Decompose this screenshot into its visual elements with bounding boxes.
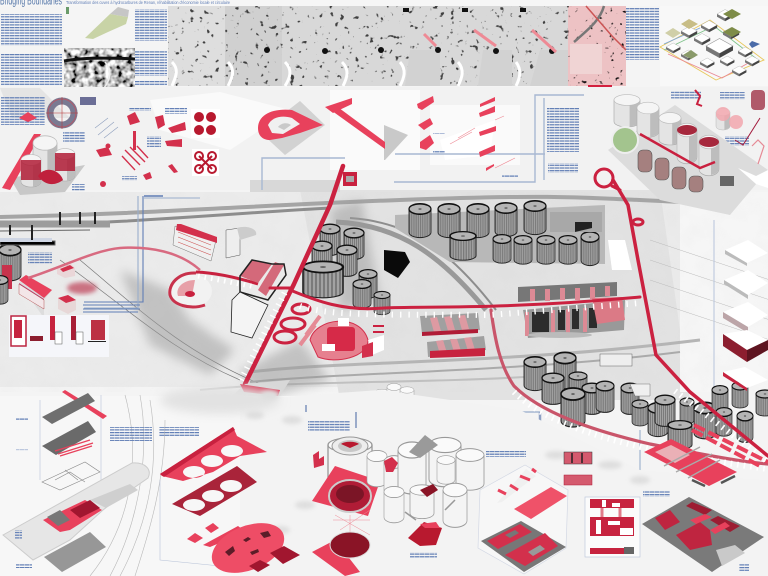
red stripes (55, 440, 93, 456)
panel: red component explosions (95, 112, 186, 187)
panel: red and grey tank group, left (2, 134, 85, 195)
red edged roof (723, 367, 768, 388)
pink bridge curve (28, 248, 200, 278)
lower red unit (408, 522, 442, 546)
red part 2 (418, 118, 433, 130)
map: pink colour aerial (568, 6, 626, 87)
panel: stacked roof studies, right (723, 240, 768, 391)
map: green regional map (64, 6, 135, 47)
pink construction lines (333, 510, 370, 535)
wire frame structure (42, 462, 100, 490)
site: small ghost tanks left of lower area (375, 383, 414, 408)
text blocks: annotations in left band (63, 108, 187, 191)
block C (57, 264, 75, 278)
site: upper tank row (395, 201, 632, 270)
small red stair and pink tanks (695, 90, 765, 164)
dark red squares (249, 546, 300, 572)
lower red-hatched tanks (638, 150, 703, 192)
top roof (497, 469, 536, 503)
panel: exploded axonometric, left (3, 390, 149, 572)
panel: lower ground (0, 386, 768, 576)
site: left small buildings and tanks (0, 212, 200, 318)
eastern road (613, 180, 768, 456)
site: lower tanks and buildings (524, 352, 768, 449)
colour swatch (80, 97, 96, 105)
text block: right column (626, 8, 659, 60)
panel: ghost tanks cluster (367, 435, 484, 546)
panel: small red elevations (9, 315, 109, 357)
floor plan (481, 521, 566, 572)
tank far left (0, 244, 21, 304)
white tanks (614, 95, 681, 145)
main diagonal road (245, 166, 343, 384)
block B (58, 295, 76, 314)
panel: round tank studies (306, 405, 380, 576)
green tank (612, 127, 638, 153)
red hairline section (486, 164, 494, 171)
plans: framed floor plans (585, 497, 640, 557)
red plate 4 (479, 145, 495, 157)
grey plate two (42, 421, 96, 455)
panel: red roof sections (478, 465, 568, 574)
site: red striped hall (231, 260, 286, 338)
text blocks: lower-right (643, 490, 749, 571)
red part 3 (420, 135, 434, 150)
site: black shadow blob (384, 250, 410, 278)
text block: tank area notes (547, 91, 749, 173)
panel: red plates with three holes (160, 427, 300, 576)
illustration: exploded building parts, centre (417, 96, 515, 171)
red diamond (19, 112, 37, 122)
plans: four-circle red plan (191, 109, 220, 138)
red plate 1 (480, 97, 495, 107)
north ring (595, 169, 613, 187)
map: black and white aerial photo (64, 48, 135, 90)
site: red-roofed sheds (420, 313, 486, 358)
grey roof sheet (409, 435, 438, 458)
panel: sequence of grey urban maps (168, 6, 568, 86)
grey core block (47, 510, 70, 526)
pink roof (514, 487, 567, 519)
red isometric plate (312, 466, 380, 516)
module tiles (666, 10, 759, 76)
panel: middle band building blocks (0, 87, 768, 192)
red building core (43, 500, 102, 532)
small red stack (313, 451, 324, 468)
site: ring courtyard (168, 272, 258, 308)
illustration: red bar (325, 98, 385, 149)
top plate (160, 427, 267, 481)
oval plate (205, 513, 291, 576)
lower round plate (312, 540, 360, 576)
small red squares (187, 523, 246, 547)
lateral road (270, 286, 292, 290)
lower unit roof (420, 522, 440, 528)
blue ductwork frames (83, 196, 714, 560)
site: red loop building with running track (274, 304, 384, 360)
text blocks: lower-left (15, 418, 199, 568)
small red stair (420, 484, 438, 497)
grey plate one (42, 393, 95, 424)
white frame panel (478, 465, 568, 574)
site: red apartment block (173, 224, 256, 261)
dark red block (723, 330, 768, 350)
red plate 2 (479, 106, 495, 117)
red unit (384, 457, 398, 472)
illustration: red teardrop plate (258, 101, 325, 155)
pink lower road (491, 310, 768, 464)
text block: ghost tanks notes (410, 451, 526, 558)
panel: site plan ground (0, 190, 768, 400)
ring diagram (46, 97, 78, 129)
panel: left analysis text and ring (1, 97, 96, 129)
east-west road (290, 290, 640, 309)
illustration: isometric tank farm with colored tanks (608, 90, 768, 215)
site: main red roads (245, 166, 768, 464)
top plate edge (160, 427, 235, 477)
overhead frame (0, 230, 90, 245)
big floor plate (3, 463, 149, 560)
diagram: isometric network modules (660, 6, 768, 86)
plans: four-circle red section (192, 149, 219, 176)
block A (19, 275, 52, 318)
connector struts (405, 500, 455, 520)
text block: centre annotations (433, 133, 518, 178)
blurred pink volume (67, 282, 97, 294)
plans: small red floor plans (564, 452, 592, 485)
inner ramp (90, 484, 138, 508)
dark red core block (70, 500, 100, 518)
site: road junctions and fences (230, 172, 768, 469)
panel: grey building plan (642, 497, 764, 572)
site: central tank cluster (303, 224, 390, 315)
lower plate (44, 532, 106, 572)
panel: header strip (0, 0, 768, 8)
panel: intro text columns (1, 9, 167, 86)
red topped tanks (677, 123, 719, 176)
site: long striped halls (518, 282, 625, 338)
panel: red strip plate (644, 425, 768, 486)
red part 1 (417, 96, 434, 110)
middle plate (172, 466, 257, 516)
red plate 3 (479, 126, 496, 136)
red bar on top (62, 390, 107, 419)
